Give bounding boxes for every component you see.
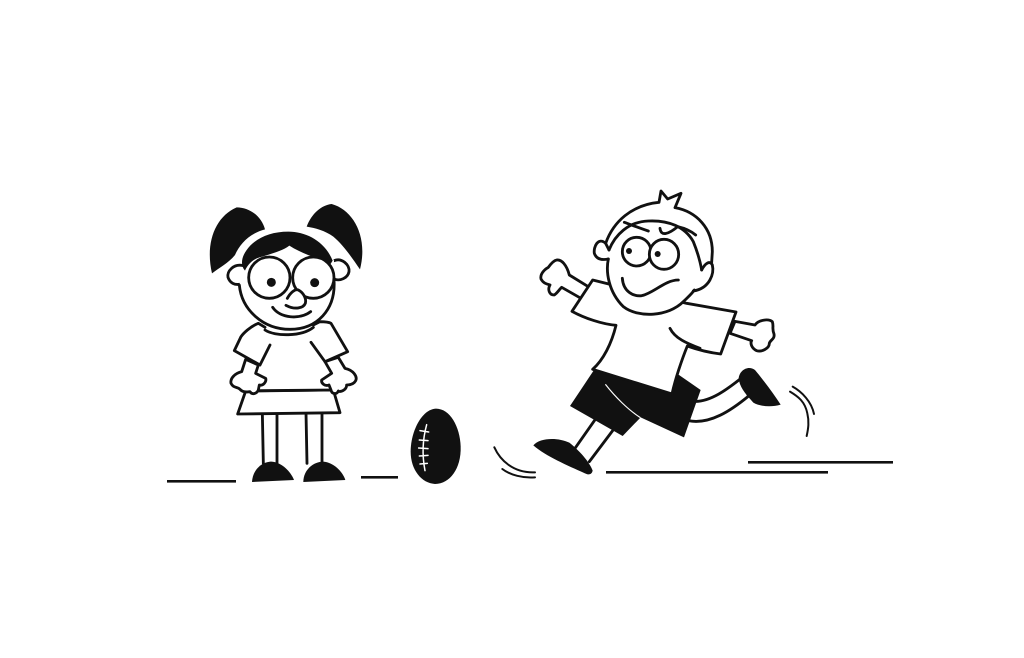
boy figure [494,191,814,478]
girl pupils [267,278,319,287]
boy back leg [688,379,749,421]
boy pupils [626,248,661,257]
boy face outline [607,259,694,314]
ground line middle [361,476,398,479]
ground line long [606,471,828,474]
girl figure [210,204,362,482]
ball laces [419,425,429,471]
girl skirt waist [258,386,331,395]
girl skirt [238,390,340,414]
boy front foot motion lines [494,447,535,478]
girl left sleeve [234,323,270,365]
boy left ear [594,241,609,259]
girl left ear [228,265,243,284]
girl left arm and hand [231,359,266,394]
girl face [239,232,334,329]
boy back shoe [739,368,781,406]
boy shorts fold [606,385,640,417]
boy front shoe [533,439,593,474]
girl hair [242,232,333,271]
boy right ear [693,263,713,291]
boy sleeve fold [670,328,700,348]
girl right arm and hand [322,357,356,394]
girl collar [265,327,313,335]
boy head [594,191,713,314]
boy shorts [570,370,701,437]
boy shirt [572,280,736,394]
girl legs and shoes [252,413,345,482]
boy mouth [622,278,678,296]
boy left arm and hand [541,260,588,299]
girl glasses [249,257,334,298]
ground line upper right [748,461,893,464]
boy back foot motion lines [790,387,814,436]
girl right sleeve [311,322,348,362]
boy eyes [622,237,679,269]
girl mouth [273,307,311,317]
boy head fill [606,202,712,314]
boy skull and tuft [606,191,712,262]
ball body [411,409,461,484]
girl body [231,322,356,414]
boy hairline [609,221,702,270]
girl torso [256,325,332,391]
boy eyebrows [624,222,696,235]
ground line left [167,480,236,483]
ball [411,409,461,484]
girl right pigtail [307,204,362,269]
boy body [494,260,814,478]
boy front leg [575,419,613,462]
girl right ear [334,260,349,280]
girl nose [286,290,306,308]
girl head [210,204,362,329]
boy right arm and hand [730,320,774,351]
girl left pigtail [210,207,265,273]
